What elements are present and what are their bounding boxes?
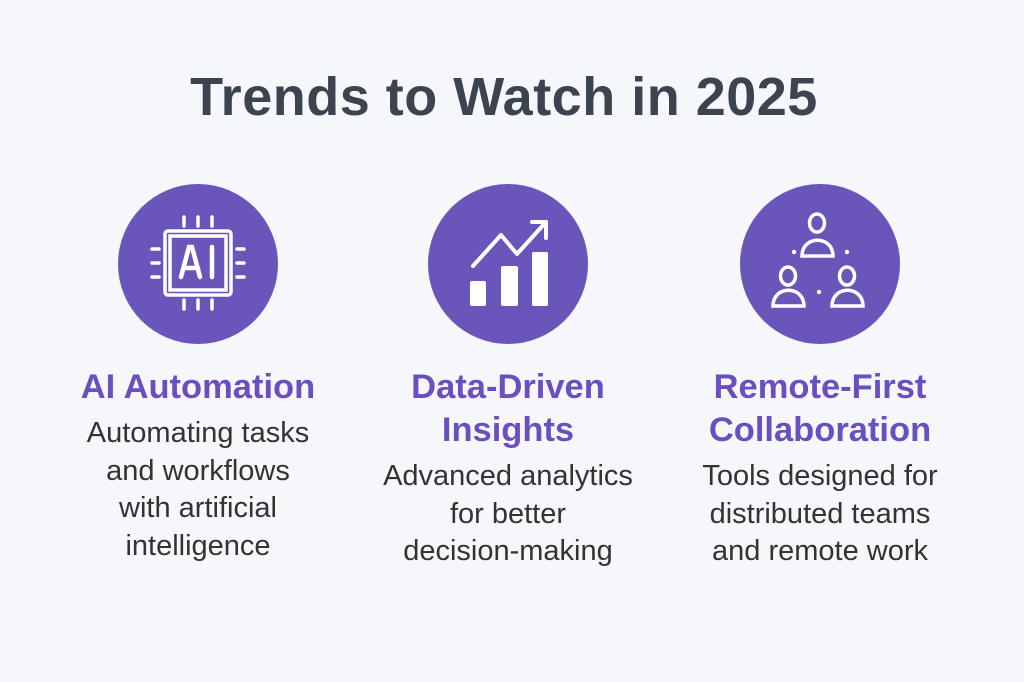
heading: AI Automation — [81, 368, 315, 406]
body text: decision-making — [403, 535, 613, 567]
body text: intelligence — [125, 530, 271, 562]
body text: with artificial — [119, 492, 277, 524]
panel: AI automation — [81, 184, 315, 562]
heading: Collaboration — [709, 411, 931, 449]
body text: Automating tasks — [87, 417, 309, 449]
icon: people network — [740, 184, 900, 344]
body text — [702, 460, 938, 567]
body text — [86, 417, 309, 562]
body text: for better — [450, 498, 566, 530]
icon: bar chart — [428, 184, 588, 344]
heading — [709, 368, 931, 449]
heading: Insights — [442, 411, 574, 449]
icon: AI chip — [118, 184, 278, 344]
body text: Advanced analytics — [383, 460, 633, 492]
heading: Remote-First — [714, 368, 926, 406]
heading — [411, 368, 605, 449]
heading: Data-Driven — [411, 368, 605, 406]
body text — [383, 460, 633, 567]
body text: and workflows — [106, 454, 290, 486]
body text: Tools designed for — [702, 460, 938, 492]
title: Trends to Watch in 2025 — [190, 67, 818, 127]
body text: and remote work — [712, 535, 928, 567]
panel: data-driven insights — [383, 184, 633, 567]
panel: remote-first collaboration — [702, 184, 938, 567]
body text: distributed teams — [710, 498, 930, 530]
